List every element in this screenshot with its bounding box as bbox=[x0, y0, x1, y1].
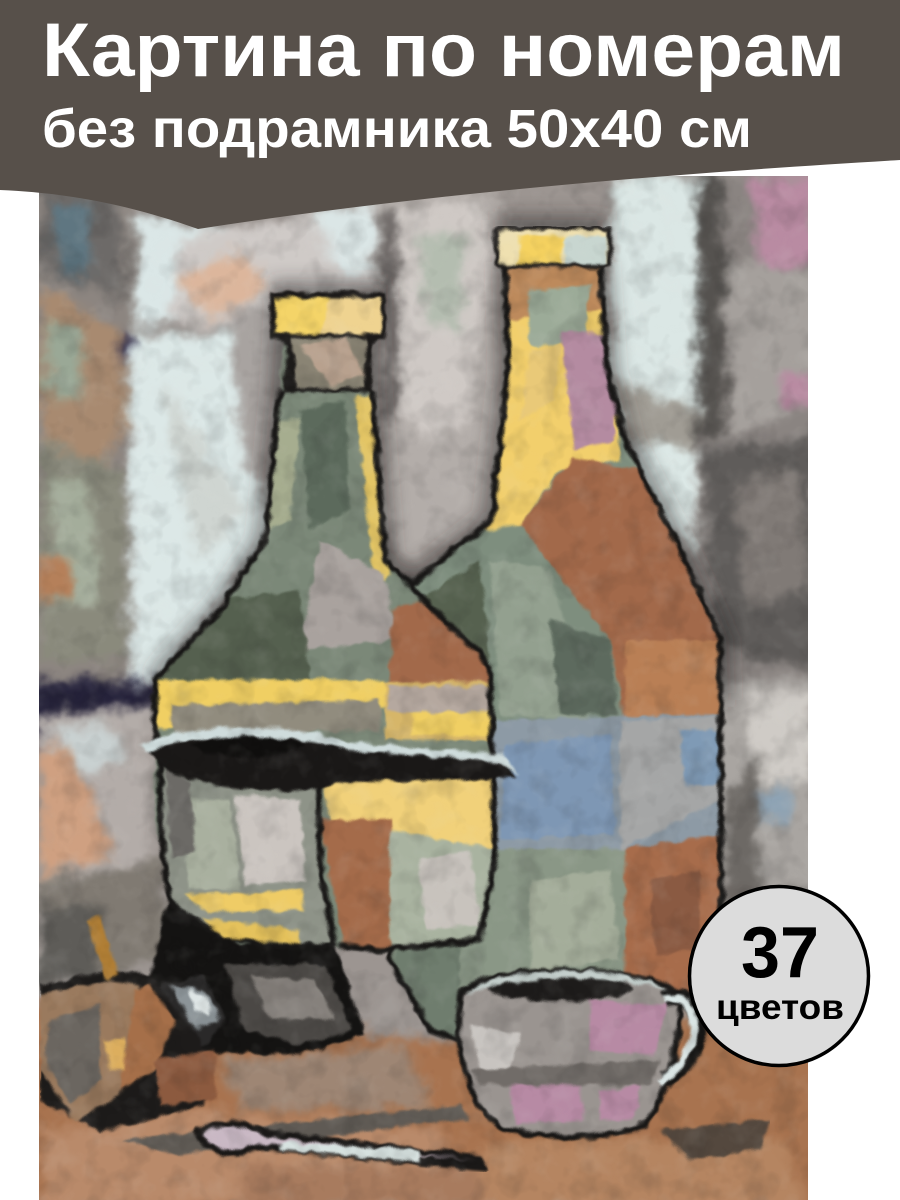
badge: 37 colours: цветов bbox=[716, 988, 844, 1027]
painting bbox=[39, 176, 808, 1200]
spoon bbox=[195, 1121, 490, 1172]
cup bbox=[459, 971, 680, 1137]
front bottle bbox=[150, 335, 500, 955]
dark vessel bbox=[145, 900, 365, 1055]
paint mottling bbox=[39, 176, 808, 1200]
banner bbox=[0, 0, 900, 229]
rear bottle bbox=[380, 255, 730, 1055]
table shadow bbox=[120, 1105, 470, 1155]
subtitle: без подрамника 50х40 см bbox=[42, 99, 752, 159]
painting objects bbox=[40, 226, 770, 1172]
title: Картина по номерам bbox=[42, 8, 845, 93]
pot bbox=[140, 727, 518, 947]
badge: 37 colours bbox=[690, 886, 868, 1066]
cup handle bbox=[660, 998, 699, 1082]
dark halos bbox=[155, 226, 722, 700]
painting background bbox=[39, 176, 808, 1200]
badge: 37 colours: 37 bbox=[741, 913, 819, 993]
front bottle cap bbox=[270, 292, 386, 392]
rear bottle cap bbox=[494, 226, 612, 268]
apple bbox=[40, 915, 215, 1132]
